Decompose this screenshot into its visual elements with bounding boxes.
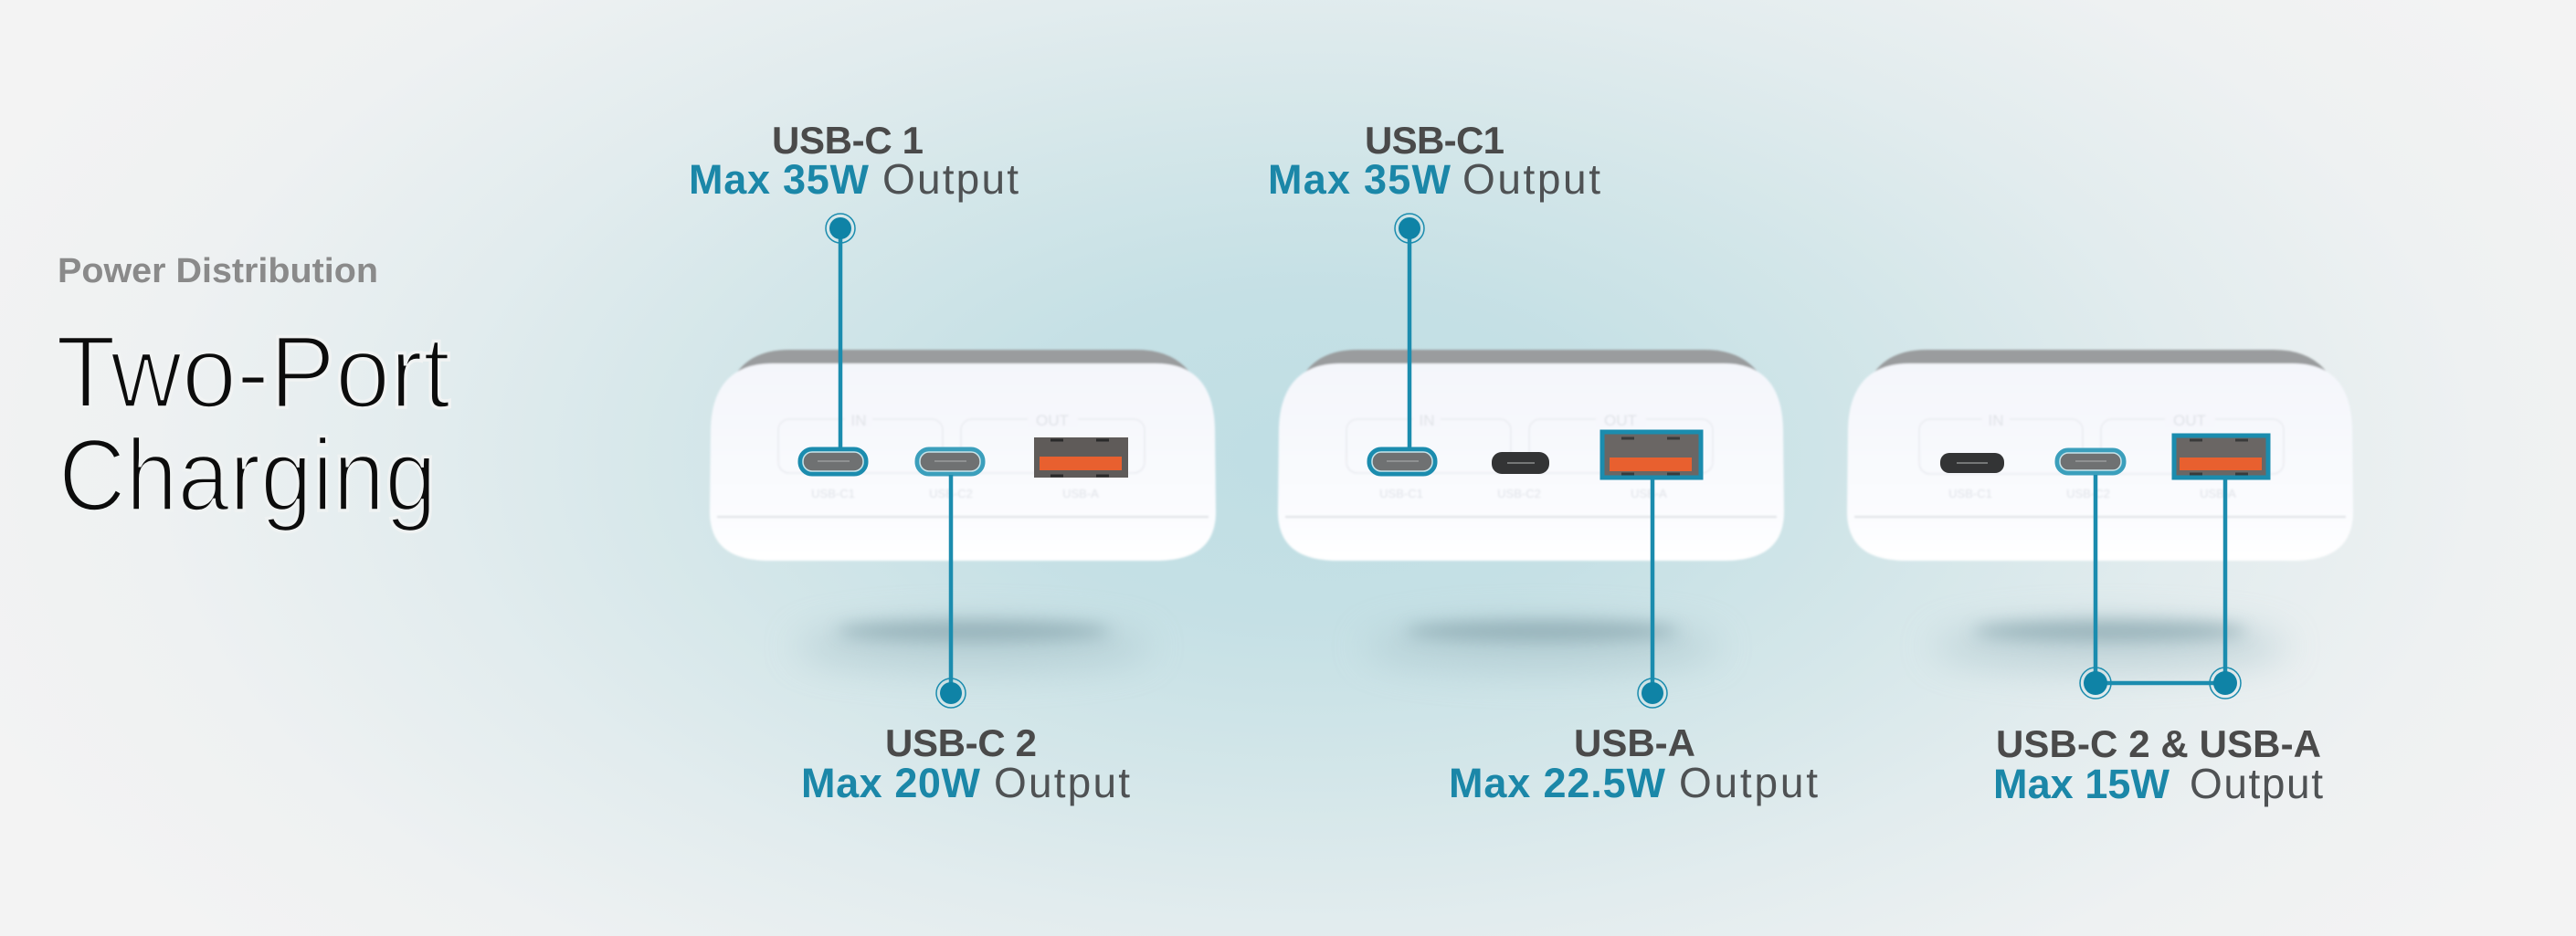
label: USB-A: Max 22.5W bbox=[1449, 760, 1666, 806]
title: Two-Port Charging: Two-Port bbox=[56, 315, 450, 429]
label: USB-C1: USB-C1 bbox=[1365, 119, 1504, 162]
label: USB-C 1: Max 35W bbox=[689, 156, 870, 203]
label: USB-C 2: Output bbox=[994, 759, 1130, 806]
label: USB-C 2: Max 20W bbox=[801, 760, 981, 806]
label: USB-C 2 and USB-A: Max 15W bbox=[1993, 761, 2170, 807]
port: USB-A bbox=[1034, 437, 1128, 478]
label: USB-A: USB-A bbox=[1574, 721, 1695, 764]
port: USB-C 1 highlighted bbox=[1369, 449, 1435, 474]
label: USB-C1 bbox=[1268, 119, 1600, 203]
power bank body bbox=[1847, 350, 2353, 561]
connector: USB-C1 bbox=[1395, 214, 1424, 447]
power bank body: USB-C2 bbox=[1497, 487, 1541, 500]
floor shadow bbox=[796, 621, 1152, 670]
label: USB-C 2 and USB-A: USB-C 2 & USB-A bbox=[1996, 722, 2321, 765]
connector: USB-C 2 bbox=[936, 475, 966, 708]
power bank body: USB-A bbox=[1631, 487, 1667, 500]
port: USB-C 2 unused bbox=[1492, 452, 1549, 474]
label: USB-C 2: USB-C 2 bbox=[885, 721, 1037, 764]
power bank body: USB-C2 bbox=[929, 487, 973, 500]
power bank body: USB-C1 bbox=[811, 487, 855, 500]
port: USB-C 1 unused bbox=[1940, 453, 2004, 473]
power bank body: OUT bbox=[2173, 412, 2206, 429]
power bank body: USB-A bbox=[2200, 487, 2236, 500]
label: USB-C1: Output bbox=[1462, 155, 1600, 203]
power bank body bbox=[1278, 350, 1784, 561]
label: USB-A bbox=[1449, 721, 1818, 806]
label: USB-C 1 bbox=[689, 119, 1019, 203]
connector: joined USB-C 2 and USB-A bbox=[2080, 475, 2241, 699]
connector: USB-C 1 bbox=[826, 214, 855, 447]
port: USB-A highlighted bbox=[1602, 432, 1701, 478]
panel: USB-C 2 and USB-A bbox=[1847, 350, 2353, 807]
port: USB-A highlighted bbox=[2174, 436, 2268, 478]
heading block bbox=[56, 252, 450, 532]
power bank body: USB-A bbox=[1062, 487, 1099, 500]
port: USB-C 1 highlighted bbox=[800, 449, 866, 474]
title: Two-Port Charging: Charging bbox=[58, 418, 437, 532]
label: USB-C 2 and USB-A bbox=[1993, 722, 2323, 807]
power bank body bbox=[710, 350, 1216, 561]
connector: USB-A bbox=[1638, 479, 1667, 708]
port: USB-C 2 highlighted bbox=[2057, 450, 2124, 473]
title: Two-Port Charging bbox=[56, 315, 450, 532]
power bank body: OUT bbox=[1604, 412, 1637, 429]
power bank body: IN bbox=[1988, 412, 2004, 429]
eyebrow: Power Distribution: Power Distribution bbox=[58, 252, 378, 290]
label: USB-A: Output bbox=[1679, 759, 1818, 806]
floor shadow bbox=[1932, 621, 2288, 670]
label: USB-C 2 bbox=[801, 721, 1130, 806]
power bank body: IN bbox=[1420, 412, 1434, 429]
label: USB-C 1: Output bbox=[882, 155, 1019, 203]
label: USB-C1: Max 35W bbox=[1268, 156, 1452, 203]
panel: USB-C 1 and USB-C 2 bbox=[689, 119, 1216, 806]
label: USB-C 2 and USB-A: Output bbox=[2190, 760, 2323, 807]
power bank body: USB-C2 bbox=[2066, 487, 2110, 500]
panel: USB-C1 and USB-A bbox=[1268, 119, 1818, 806]
label: USB-C 1: USB-C 1 bbox=[772, 119, 924, 162]
power bank body: USB-C1 bbox=[1379, 487, 1423, 500]
floor shadow bbox=[1364, 621, 1720, 670]
power bank body: OUT bbox=[1036, 412, 1069, 429]
port: USB-C 2 highlighted bbox=[917, 449, 983, 474]
power bank body: USB-C1 bbox=[1948, 487, 1992, 500]
power bank body: IN bbox=[851, 412, 866, 429]
